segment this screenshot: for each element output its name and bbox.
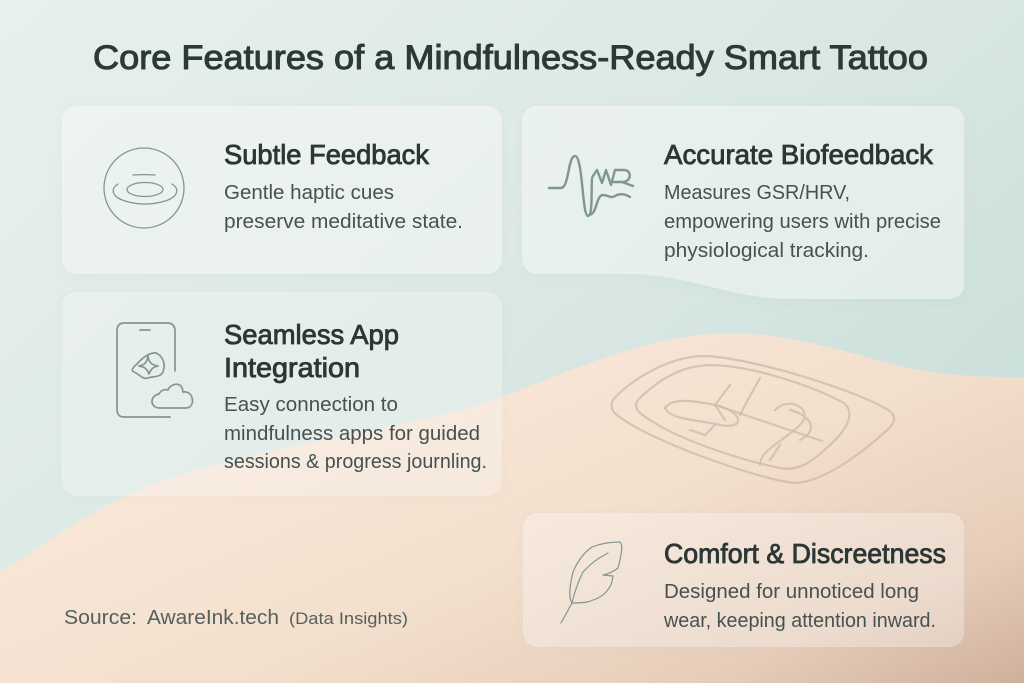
title: Core Features of a Mindfulness-Ready Smart Tattoo [93,39,928,77]
heading [224,319,399,383]
body text: mindfulness apps for guided [224,422,480,445]
tattoo engraving on skin [611,356,894,483]
heading: Seamless App [224,319,399,350]
panel: seamless app integration [62,292,502,496]
body text [224,393,487,473]
heading: Integration [224,352,360,383]
body text: Gentle haptic cues [224,181,394,204]
heading: Accurate Biofeedback [664,139,934,170]
body text: empowering users with precise [664,210,941,233]
source note [64,607,408,629]
source note: (Data Insights) [289,609,408,628]
body text [224,181,463,233]
body text: Designed for unnoticed long [664,580,919,603]
body text: preserve meditative state. [224,210,463,233]
body text: wear, keeping attention inward. [663,609,936,632]
icon: biosignal wave [549,156,633,216]
panel: comfort and discreetness [523,513,964,647]
body text [663,580,936,632]
body text: Easy connection to [224,393,398,416]
source note: AwareInk.tech [147,607,279,629]
source note: Source: [64,607,137,629]
body text: physiological tracking. [664,239,869,262]
body text: Measures GSR/HRV, [664,181,850,204]
panel: accurate biofeedback [522,106,964,299]
background: skin curve [0,333,1024,683]
heading: Subtle Feedback [224,139,430,170]
body text [664,181,941,262]
panel: subtle feedback [62,106,502,274]
heading: Comfort & Discreetness [664,538,946,569]
icon: haptic ripple [104,148,184,228]
icon: phone with cloud [117,323,192,417]
icon: feather [561,542,622,623]
body text: sessions & progress journling. [224,450,487,473]
